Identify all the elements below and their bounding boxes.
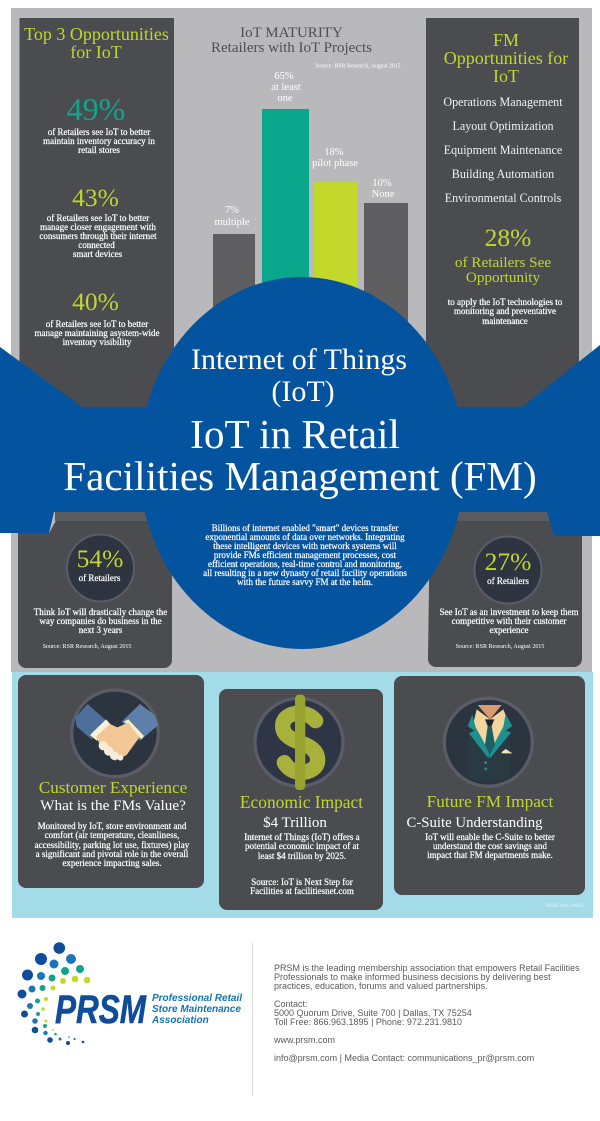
heading: future FM impact: Future FM Impact — [427, 792, 554, 811]
panel: light blue background — [12, 672, 593, 918]
text: about PRSM: 5000 Quorum Drive, Suite 700 | Dallas, TX 75254 — [274, 1008, 472, 1018]
text: about PRSM: PRSM is the leading membership association that empowers Retail Facilities — [274, 963, 580, 973]
icon: suit — [444, 698, 532, 786]
heading: FM opportunities: FM — [493, 30, 519, 50]
text: of retailers see opportunity: of Retailers See — [455, 254, 551, 271]
label: 18%: pilot phase — [312, 158, 358, 169]
text: 43% description: smart devices — [73, 249, 123, 259]
bar: at least one — [262, 109, 309, 349]
badge: 54% — [67, 534, 134, 602]
text: customer experience description: a significant and pivotal role in the overall — [36, 849, 189, 859]
text: 54% description: way companies do business in the — [39, 616, 162, 626]
panel: 54% of retailers: of Retailers — [79, 573, 121, 583]
text: intro paragraph: these intelligent devices with network systems will — [213, 541, 397, 551]
text: 49% description: retail stores — [78, 145, 120, 155]
text: 54% description: next 3 years — [79, 625, 123, 635]
text: 43% description: manage closer engagement with — [40, 222, 156, 232]
text: about PRSM: Contact: — [274, 999, 308, 1009]
panel: grey background — [11, 8, 592, 672]
text: 49% description: of Retailers see IoT to better — [48, 127, 150, 137]
text: 40% description: inventory visibility — [63, 337, 132, 347]
label: 7%: multiple — [214, 217, 250, 228]
source note: Source: RSR Research, August 2015 — [456, 644, 544, 650]
list: opportunities: Environmental Controls — [445, 191, 562, 205]
text: 40% description: manage maintaining asystem-wide — [35, 328, 159, 338]
text: about PRSM: practices, education, forums and valued partnerships. — [274, 981, 488, 991]
icon: handshake — [72, 690, 158, 777]
icon: dollar sign — [255, 695, 343, 790]
text: about PRSM: Toll Free: 866.963.1895 | Phone: 972.231.9810 — [274, 1017, 462, 1027]
panel: 54% of retailers — [18, 512, 172, 668]
subheading: $4 trillion: $4 Trillion — [263, 815, 327, 831]
text: intro paragraph: efficient operations, real-time control and monitoring, — [208, 559, 402, 569]
subheading: c-suite understanding: C-Suite Understanding — [406, 815, 543, 831]
label: 65%: 65% — [274, 71, 294, 82]
subheading: FM value: What is the FMs Value? — [40, 797, 186, 814]
text: 54% description: Think IoT will drastically change the — [34, 607, 167, 617]
label: 65%: at least — [271, 82, 301, 93]
text: customer experience description: Monitored by IoT, store environment and — [38, 821, 187, 831]
text: 28% description: monitoring and preventative — [454, 306, 556, 316]
stat: 49%: 49% — [67, 91, 125, 127]
text: 28% description: to apply the IoT technologies to — [448, 297, 563, 307]
label: 10%: None — [372, 189, 395, 200]
badge: 27% — [474, 536, 542, 604]
text: intro paragraph: all resulting in a new dynasty of retail facility operations — [203, 568, 407, 578]
text: intro paragraph: Billions of internet enabled "smart" devices transfer — [212, 523, 398, 533]
text: 43% description: of Retailers see IoT to better — [47, 213, 149, 223]
text: customer experience description: experience impacting sales. — [62, 858, 162, 868]
text: 49% description: maintain inventory accuracy in — [43, 136, 155, 146]
label: 65%: one — [277, 93, 293, 104]
chart: IoT maturity bars — [211, 25, 408, 354]
text: future FM description: understand the cost savings and — [433, 841, 547, 851]
text: 28% description: maintenance — [482, 316, 528, 326]
text: 40% description: of Retailers see IoT to better — [46, 319, 148, 329]
heading: IoT maturity: Retailers with IoT Projects — [211, 40, 372, 56]
text: 27% description: competitive with their customer — [452, 616, 566, 626]
logo dots — [18, 942, 90, 1045]
bar: multiple — [213, 234, 255, 354]
text: 27% description: experience — [490, 625, 528, 635]
text: 27% description: See IoT as an investment to keep them — [439, 607, 579, 617]
panel: 27% of retailers: 27% — [485, 547, 531, 576]
text: 43% description: consumers through their internet — [39, 231, 157, 241]
text: economic impact description: least $4 trillion by 2025. — [258, 851, 346, 861]
list: opportunities: Operations Management — [443, 95, 563, 109]
label: 10%: 10% — [372, 178, 392, 189]
text: about PRSM: info@prsm.com | Media Contact: communications_pr@prsm.com — [274, 1053, 534, 1063]
heading: top 3 opportunities: for IoT — [70, 42, 122, 62]
title: internet of things: (IoT) — [271, 375, 335, 408]
panel: 27% of retailers: of Retailers — [487, 576, 529, 586]
text: customer experience description: accessibility, parking lot use, fixtures) play — [35, 840, 190, 850]
bar: pilot phase — [314, 182, 357, 342]
list: opportunities: Building Automation — [452, 167, 554, 181]
card: economic impact — [219, 689, 383, 910]
text: intro paragraph: exponential amounts of data over networks. Integrating — [205, 532, 405, 542]
logo: PRSM — [18, 942, 242, 1045]
label: 7%: 7% — [225, 205, 239, 216]
text: of retailers see opportunity: Opportunity — [466, 269, 541, 286]
text: customer experience description: comfort (air temperature, cleanliness, — [45, 830, 179, 840]
card: future FM impact — [394, 676, 585, 895]
text: economic impact description: Internet of Things (IoT) offers a — [244, 832, 360, 842]
note: PRSM web code: PRSM Web 100815 — [545, 904, 585, 909]
logo wordmark: PRSM — [55, 988, 147, 1032]
logo tagline: Store Maintenance — [152, 1004, 241, 1015]
stat: 40%: 40% — [72, 287, 119, 316]
text: intro paragraph: provide FMs efficient management processes, cost — [214, 550, 397, 560]
label: 18%: 18% — [324, 147, 344, 158]
logo tagline: Professional Retail — [152, 993, 242, 1004]
heading: customer experience: Customer Experience — [39, 778, 188, 797]
heading: FM opportunities: Opportunities for — [444, 48, 568, 68]
text: economic impact source: Facilities at facilitiesnet.com — [250, 886, 354, 896]
heading: top 3 opportunities: Top 3 Opportunities — [24, 24, 169, 44]
panel: top 3 opportunities — [20, 18, 174, 418]
list: opportunities: Layout Optimization — [452, 119, 554, 133]
banner: blue ribbon and ellipse — [0, 277, 600, 649]
text: intro paragraph: with the future savvy FM at the helm. — [237, 577, 373, 587]
source note: Source: RSR Research, August 2015 — [315, 64, 401, 70]
title: internet of things: Internet of Things — [191, 343, 407, 376]
logo tagline: Association — [151, 1015, 209, 1026]
panel: 54% of retailers: 54% — [77, 544, 123, 573]
text: about PRSM: www.prsm.com — [273, 1035, 335, 1045]
heading: FM opportunities: IoT — [493, 66, 519, 86]
list: opportunities: Equipment Maintenance — [444, 143, 562, 157]
text: about PRSM: Professionals to make informed business decisions by delivering best — [274, 972, 551, 982]
text: economic impact description: potential economic impact of at — [245, 841, 359, 851]
title: IoT in retail facilities management: IoT in Retail — [190, 411, 400, 457]
stat: 28%: 28% — [485, 223, 531, 252]
title: IoT in retail facilities management: Facilities Management (FM) — [63, 453, 537, 500]
stat: 43%: 43% — [72, 183, 119, 212]
card: customer experience — [18, 675, 204, 888]
text: future FM description: IoT will enable the C-Suite to better — [425, 832, 555, 842]
text: economic impact source: Source: IoT is Next Step for — [251, 877, 353, 887]
panel: FM opportunities — [426, 18, 579, 418]
source note: Source: RSR Research, August 2015 — [43, 644, 131, 650]
bar: none — [364, 203, 408, 353]
heading: economic impact: Economic Impact — [240, 792, 363, 812]
text: 43% description: connected — [78, 240, 115, 250]
heading: IoT maturity: IoT MATURITY — [240, 25, 343, 41]
divider — [252, 943, 253, 1096]
panel: 27% of retailers — [428, 512, 582, 667]
text: future FM description: impact that FM departments make. — [427, 850, 553, 860]
